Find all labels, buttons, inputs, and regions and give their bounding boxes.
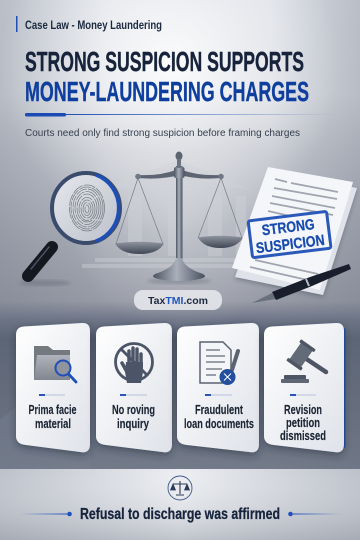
footer conclusion: Refusal to discharge was affirmed	[80, 506, 280, 523]
icon: scales of justice	[115, 152, 243, 284]
icon: gavel	[281, 339, 326, 383]
subtitle: Courts need only find strong suspicion before framing charges	[25, 128, 300, 139]
title	[25, 46, 309, 107]
stamp: strong suspicion	[248, 211, 331, 258]
card accent	[39, 394, 65, 396]
label	[112, 402, 155, 431]
icon: folder with magnifier	[34, 346, 76, 382]
label	[28, 402, 76, 431]
card accent	[120, 394, 147, 396]
label	[280, 402, 326, 443]
panel: prima facie material	[16, 323, 90, 452]
stamp: strong suspicion: STRONG	[261, 216, 316, 239]
label: loan documents	[184, 416, 254, 431]
label: petition	[286, 415, 320, 430]
panel: revision petition dismissed	[264, 323, 346, 452]
label: dismissed	[280, 428, 326, 443]
accent rule	[25, 113, 336, 116]
label: No roving	[112, 402, 155, 417]
card accent	[290, 394, 316, 396]
panel: fraudulent loan documents	[177, 323, 259, 452]
footer band	[0, 469, 360, 540]
badge: TaxTMI.com	[134, 290, 222, 310]
panel: no roving inquiry	[96, 323, 172, 452]
badge: TaxTMI.com: TaxTMI.com	[148, 295, 208, 307]
label: Fraudulent	[195, 402, 243, 417]
label	[184, 402, 254, 431]
label: inquiry	[117, 416, 150, 431]
stamp: strong suspicion: SUSPICION	[255, 232, 326, 257]
icon: footer scales in circle	[168, 476, 192, 500]
icon: pen	[252, 264, 351, 303]
faint courthouse	[82, 160, 267, 268]
document text lines	[250, 179, 338, 281]
icon: magnifying glass with fingerprint	[19, 173, 120, 286]
icon: document stack with stamp	[232, 167, 357, 295]
icon: document with x badge	[200, 342, 238, 385]
label: Revision	[284, 402, 322, 417]
label: Prima facie	[28, 402, 76, 417]
label: material	[35, 416, 71, 431]
icon: prohibited hand	[116, 344, 152, 383]
icon: fingerprint	[70, 185, 104, 231]
card accent	[205, 394, 232, 396]
kicker: case law label: Case Law - Money Laundering	[25, 18, 162, 32]
